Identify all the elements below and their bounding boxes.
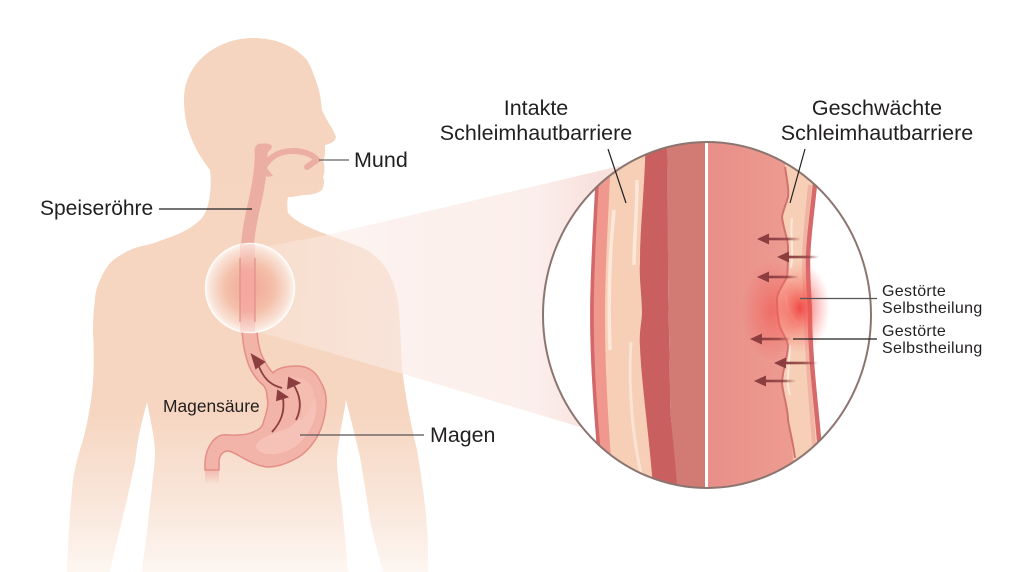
divider (705, 143, 708, 487)
label: Intakte Schleimhautbarriere: Intakte (504, 96, 568, 120)
label: Speiseröhre: Speiseröhre (40, 197, 153, 220)
reflux arrows (252, 355, 300, 432)
label: Magensäure: Magensäure (163, 396, 260, 416)
label: Gestörte Selbstheilung 1: Selbstheilung (882, 300, 983, 317)
label: Intakte Schleimhautbarriere (440, 96, 632, 203)
intact lumen: medium band (667, 130, 706, 500)
weakened wall: inner edge (777, 167, 795, 458)
label: Gestörte Selbstheilung 2: Gestörte (882, 323, 946, 340)
inflammation (748, 266, 828, 352)
esophagus and throat (247, 143, 317, 250)
label: Gestörte Selbstheilung 2: Selbstheilung (882, 340, 983, 357)
label: Mund (319, 148, 408, 172)
weakened lumen (708, 143, 794, 487)
acid arrows (750, 234, 819, 386)
intact lumen: dark band (640, 148, 677, 484)
label: Intakte Schleimhautbarriere: Schleimhautbarriere (440, 121, 632, 145)
label: Gestörte Selbstheilung 2 (793, 323, 983, 357)
label: Geschwächte Schleimhautbarriere: Schleimhautbarriere (781, 121, 973, 145)
label: Mund: Mund (354, 148, 408, 172)
intact wall: mucosa (605, 156, 652, 477)
label: Gestörte Selbstheilung 1 (800, 283, 983, 317)
weakened wall: outer edge (804, 185, 814, 445)
body silhouette (67, 38, 428, 572)
label: Magen: Magen (430, 423, 495, 447)
weakened wall: folds (786, 218, 798, 395)
focus lens on esophagus (206, 244, 294, 332)
detail circle (543, 130, 871, 500)
stomach (205, 331, 326, 484)
weakened wall: mucosa (778, 164, 817, 461)
intact wall: highlights (609, 180, 637, 350)
label: Geschwächte Schleimhautbarriere (781, 96, 973, 203)
lens outline (543, 142, 871, 488)
label: Geschwächte Schleimhautbarriere: Geschwächte (812, 96, 942, 120)
magnifier beam (262, 166, 620, 436)
intact wall: outer edge (590, 156, 652, 477)
label: Gestörte Selbstheilung 1: Gestörte (882, 283, 946, 300)
